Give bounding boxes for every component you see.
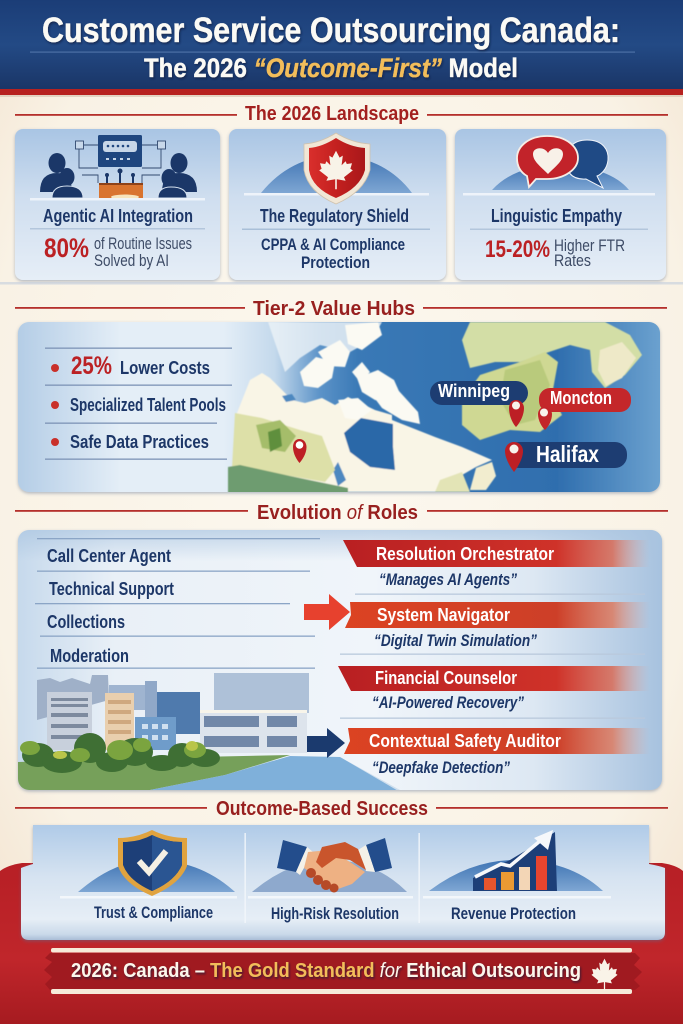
card heading: Agentic AI Integration (43, 206, 193, 226)
legacy roles list (35, 538, 320, 669)
city label: Winnipeg (430, 381, 528, 427)
city label: Moncton (538, 388, 631, 430)
panel: Agentic AI Integration (15, 129, 220, 280)
stat: 80%: 80% (44, 233, 89, 263)
new role: Contextual Safety Auditor: “Deepfake Detection” (372, 758, 510, 777)
bullet: lower costs: 25% (71, 352, 112, 380)
section heading: Tier-2 Value Hubs: Tier-2 Value Hubs (253, 298, 415, 320)
bullet: safe data practices: Safe Data Practices (70, 432, 209, 452)
stat description: of Routine Issues (94, 234, 192, 253)
arrow: navy (307, 728, 345, 758)
footer banner (44, 948, 642, 994)
new role: System Navigator (340, 602, 650, 655)
title banner (0, 0, 683, 97)
panel: The Regulatory Shield (229, 129, 446, 280)
item: Trust & Compliance (60, 830, 237, 922)
footer red background (0, 863, 683, 1024)
bullet: specialized talent pools: Specialized Talent Pools (70, 395, 226, 415)
icon: growth chart (473, 830, 557, 891)
stat: 15-20%: 15-20% (485, 236, 550, 263)
city label: Moncton: Moncton (550, 388, 612, 408)
item: High-Risk Resolution (248, 838, 413, 923)
icon: handshake (277, 838, 392, 892)
city label: Winnipeg: Winnipeg (438, 381, 510, 401)
section heading: Outcome-Based Success: Outcome-Based Success (216, 798, 428, 820)
footer text: 2026: Canada – The Gold Standard for Ethical Outsourcing (71, 960, 581, 982)
legacy roles list: Technical Support (49, 579, 174, 599)
new role: Financial Counselor (338, 666, 650, 719)
city label: Halifax: Halifax (536, 441, 599, 467)
new role: Contextual Safety Auditor (344, 728, 652, 777)
section heading: The 2026 Landscape: The 2026 Landscape (245, 103, 419, 125)
card heading: The Regulatory Shield (260, 206, 409, 226)
new role: Contextual Safety Auditor: Contextual Safety Auditor (369, 731, 561, 751)
stat description: Solved by AI (94, 251, 169, 270)
icon: maple leaf shield (244, 133, 429, 204)
card heading: Linguistic Empathy (491, 206, 622, 226)
legacy roles list: Moderation (50, 646, 129, 666)
legacy roles list: Collections (47, 612, 125, 632)
panel: outcome-based success (21, 825, 665, 940)
stat description (554, 236, 625, 270)
stat description: Rates (554, 251, 591, 270)
item: Revenue Protection: Revenue Protection (451, 905, 576, 923)
city label: Halifax (505, 441, 627, 472)
panel: Linguistic Empathy (455, 129, 666, 280)
new role: Financial Counselor: “AI-Powered Recovery” (372, 693, 524, 712)
benefits list (45, 348, 232, 460)
title line 2: The 2026 “Outcome-First” Model (144, 53, 518, 83)
new role: Financial Counselor: Financial Counselor (375, 668, 517, 688)
map of Canada (228, 322, 642, 495)
icon: speech bubbles with heart (463, 136, 655, 196)
item: Trust & Compliance: Trust & Compliance (94, 904, 213, 922)
stat description (94, 234, 192, 270)
new role: Resolution Orchestrator: “Manages AI Agents” (379, 570, 517, 589)
illustration: city skyline (18, 673, 400, 792)
arrow: red (304, 594, 350, 630)
map pin: prairie (293, 439, 306, 463)
section heading: Evolution of Roles: Evolution of Roles (257, 502, 418, 524)
panel: Tier-2 hubs map (18, 322, 660, 495)
new role: System Navigator: “Digital Twin Simulation” (374, 631, 537, 650)
new role: Resolution Orchestrator: Resolution Orchestrator (376, 544, 554, 564)
icon: maple leaf (591, 959, 618, 990)
new role: System Navigator: System Navigator (377, 605, 510, 625)
icon: AI network with people (30, 135, 205, 200)
bullet: specialized talent pools (51, 395, 226, 415)
item: Revenue Protection (423, 830, 611, 923)
new role: Resolution Orchestrator (343, 540, 650, 595)
bullet: lower costs (51, 352, 210, 380)
panel: evolution of roles (18, 530, 662, 792)
card description: CPPA & AI Compliance (261, 235, 405, 254)
stat description: Higher FTR (554, 236, 625, 255)
card description (261, 235, 405, 272)
card description: Protection (301, 253, 370, 272)
icon: shield with check (118, 830, 187, 896)
bullet: lower costs: Lower Costs (120, 358, 210, 378)
item: High-Risk Resolution: High-Risk Resolution (271, 905, 399, 923)
legacy roles list: Call Center Agent (47, 546, 171, 566)
